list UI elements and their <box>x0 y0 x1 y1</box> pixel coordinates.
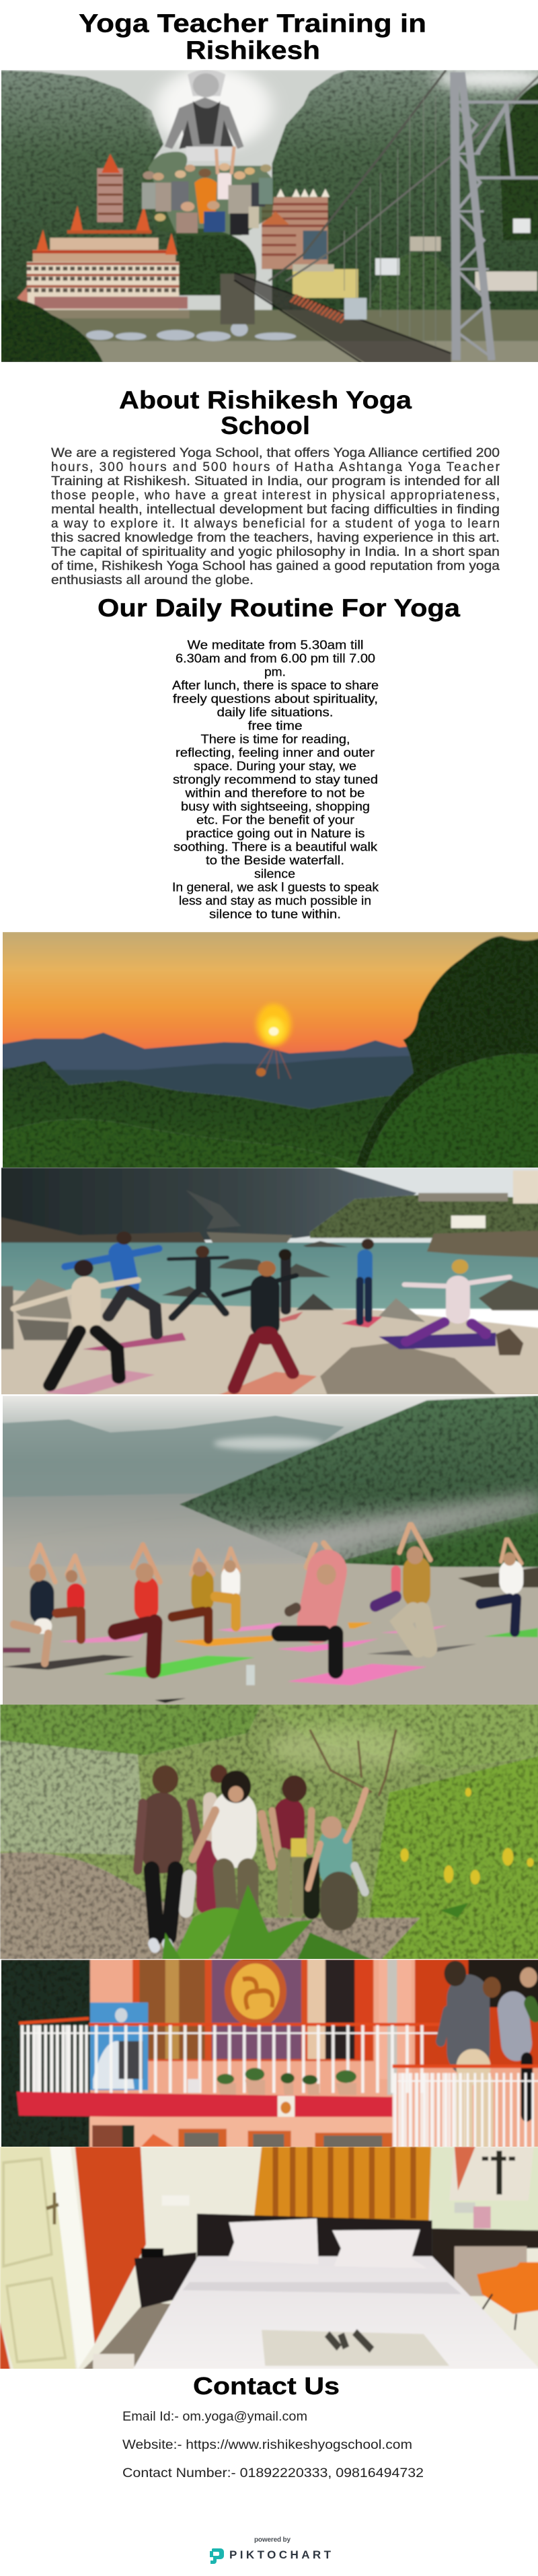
daily routine text: 6.30am and from 6.00 pm till 7.00 <box>176 651 375 665</box>
headboard <box>197 2214 432 2262</box>
group of students <box>142 147 276 236</box>
about paragraph: this sacred knowledge from the teachers, having experience in this art. <box>51 531 500 545</box>
right hotel building <box>262 188 358 298</box>
daily routine text: silence <box>254 867 295 880</box>
heading: daily routine: Our Daily Routine For Yoga <box>98 594 460 622</box>
red balcony slab <box>17 2091 393 2120</box>
contact details: Contact Number:- 01892220333, 09816494732 <box>122 2466 424 2480</box>
students in tree pose <box>13 1525 522 1670</box>
heading: about: School <box>221 412 310 439</box>
daily routine text: strongly recommend to stay tuned <box>173 773 378 786</box>
photo: tree pose on the misty beach <box>0 1396 538 1707</box>
about paragraph: We are a registered Yoga School, that offers Yoga Alliance certified 200 <box>51 446 500 460</box>
people on balcony <box>440 1961 537 2143</box>
daily routine text: soothing. There is a beautiful walk <box>174 840 378 853</box>
photo: warrior pose on the river bank <box>0 1168 538 1396</box>
photo: nature walk through the forest <box>0 1704 538 1962</box>
about paragraph: enthusiasts all around the globe. <box>51 573 254 587</box>
title: Yoga Teacher Training in <box>79 9 426 38</box>
daily routine text <box>172 638 379 921</box>
front railing <box>393 2066 538 2111</box>
daily routine text: less and stay as much possible in <box>179 894 371 907</box>
group of walkers <box>138 1764 366 1947</box>
daily routine text: etc. For the benefit of your <box>196 813 354 826</box>
about paragraph: hours, 300 hours and 500 hours of Hatha Ashtanga Yoga Teacher <box>51 460 500 474</box>
daily routine text: We meditate from 5.30am till <box>187 638 363 651</box>
about paragraph: The capital of spirituality and yogic philosophy in India. In a short span <box>51 545 500 559</box>
contact details <box>122 2410 424 2480</box>
icon: Piktochart mark <box>210 2548 224 2564</box>
Shiva poster <box>90 2003 148 2090</box>
daily routine text: reflecting, feeling inner and outer <box>176 746 375 759</box>
yoga mats <box>3 1622 538 1685</box>
yoga mats <box>45 1312 496 1396</box>
about paragraph: mental health, intellectual development but facing difficulties in finding <box>51 503 500 517</box>
heading: about: About Rishikesh Yoga <box>119 386 412 414</box>
title <box>79 9 426 65</box>
daily routine text: After lunch, there is space to share <box>172 678 379 692</box>
daily routine text: daily life situations. <box>217 705 334 719</box>
daily routine text: free time <box>248 719 303 732</box>
yellow leaves <box>400 1788 534 1884</box>
pillows <box>227 2219 427 2268</box>
temple <box>17 153 190 318</box>
daily routine text: pm. <box>264 665 286 678</box>
daily routine text: In general, we ask l guests to speak <box>172 880 379 894</box>
red wall <box>75 2147 146 2344</box>
daily routine text: freely questions about spirituality, <box>173 692 378 705</box>
contact details: Email Id:- om.yoga@ymail.com <box>122 2410 307 2424</box>
Shiva figure <box>165 70 243 161</box>
curtain <box>253 2147 431 2226</box>
heading: about <box>119 386 412 439</box>
daily routine text: busy with sightseeing, shopping <box>181 799 370 813</box>
Piktochart logo: powered by <box>254 2536 291 2544</box>
desk and chair <box>432 2228 538 2330</box>
about paragraph: a way to explore it. It always beneficial for a student of yoga to learn <box>51 517 500 531</box>
lower floor <box>89 2117 393 2149</box>
photo: Rishikesh temple, Shiva, group and suspension bridge <box>0 66 538 363</box>
photo: ashram balcony <box>0 1956 538 2149</box>
heading: contact us: Contact Us <box>193 2372 340 2400</box>
bed <box>132 2256 538 2370</box>
door <box>0 2147 95 2370</box>
daily routine text: space. During your stay, we <box>194 759 356 773</box>
towels and remotes <box>262 2330 449 2366</box>
wall art <box>449 2147 534 2201</box>
daily routine text: practice going out in Nature is <box>186 826 364 840</box>
bridge tower <box>451 72 538 361</box>
about paragraph: of time, Rishikesh Yoga School has gained a good reputation from yoga <box>51 559 500 573</box>
photo: guest bedroom <box>0 2147 538 2370</box>
contact details: Website:- https://www.rishikeshyogschool.com <box>122 2438 412 2452</box>
daily routine text: silence to tune within. <box>209 907 341 921</box>
plant pots <box>188 2068 356 2095</box>
daily routine text: to the Beside waterfall. <box>206 853 344 867</box>
photo: sunset over the mountains <box>0 931 538 1169</box>
about paragraph: Training at Rishikesh. Situated in India, our program is intended for all <box>51 474 500 489</box>
Piktochart logo <box>210 2536 332 2564</box>
nightstand and phone <box>134 2248 196 2308</box>
railing <box>19 2018 444 2059</box>
Piktochart logo: PIKTOCHART <box>229 2548 332 2561</box>
about paragraph: those people, who have a great interest in physical appropriateness, <box>51 489 500 503</box>
suspension bridge <box>234 70 538 363</box>
foreground plants <box>162 1884 468 1962</box>
about paragraph <box>51 446 500 587</box>
daily routine text: within and therefore to not be <box>184 786 364 799</box>
students in warrior pose <box>13 1231 510 1388</box>
daily routine text: There is time for reading, <box>200 732 350 746</box>
title: Rishikesh <box>186 36 320 65</box>
river rocks <box>86 322 296 341</box>
